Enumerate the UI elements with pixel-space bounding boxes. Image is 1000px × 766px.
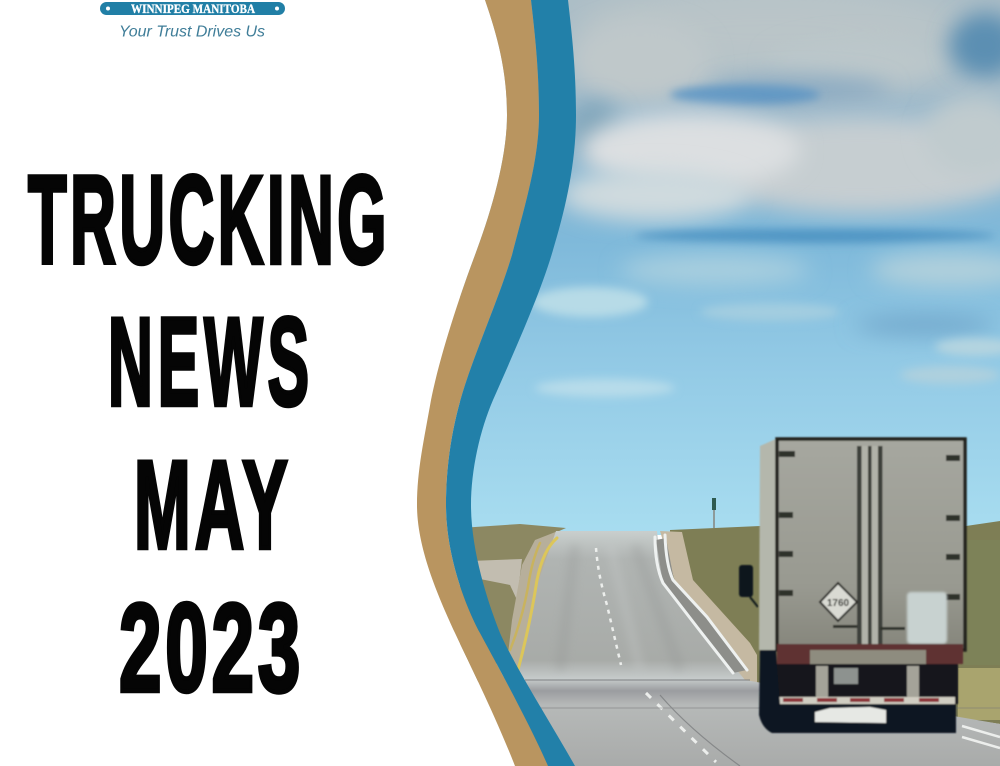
light gap under truck bbox=[815, 707, 886, 723]
left grass bbox=[460, 524, 566, 700]
right grass bbox=[670, 521, 1000, 724]
mirror bbox=[739, 565, 758, 607]
logo banner: WINNIPEG MANITOBA bbox=[131, 2, 255, 16]
road lane dashes bbox=[596, 548, 1000, 762]
underride frame bbox=[772, 664, 958, 704]
sky with clouds bbox=[460, 0, 1000, 535]
title bbox=[28, 151, 390, 718]
road wear streaks bbox=[560, 545, 680, 670]
logo bbox=[100, 2, 285, 40]
hazmat placard bbox=[820, 583, 857, 621]
truck bbox=[739, 438, 965, 733]
roadside sign bbox=[712, 498, 716, 528]
logo tagline: Your Trust Drives Us bbox=[119, 24, 265, 40]
door handles bbox=[833, 625, 905, 630]
background photo: truck on highway bbox=[460, 0, 1000, 766]
title: NEWS bbox=[108, 293, 314, 432]
road surface bbox=[495, 531, 1000, 766]
left gravel patch bbox=[470, 559, 522, 600]
white left panel bbox=[0, 0, 515, 766]
door bars bbox=[857, 446, 882, 651]
dark asphalt between white lines bbox=[656, 538, 747, 673]
tan wave band bbox=[417, 0, 549, 766]
white edge lines bbox=[655, 535, 747, 673]
white patch bbox=[907, 592, 947, 644]
title line: may: MAY bbox=[134, 436, 292, 575]
left road shoulder bbox=[505, 531, 560, 680]
right road shoulder bbox=[660, 531, 757, 690]
bumper band bbox=[777, 644, 963, 664]
wheels and lower frame bbox=[759, 650, 956, 733]
title line: 2023: 2023 bbox=[119, 579, 304, 718]
yellow edge line bbox=[510, 538, 557, 670]
blue wave band bbox=[446, 0, 576, 766]
hinges bbox=[779, 451, 960, 600]
trailer side bbox=[759, 438, 778, 652]
title line: trucking: TRUCKING bbox=[28, 151, 390, 290]
trailer rear doors bbox=[777, 439, 965, 650]
hazmat placard: 1760 bbox=[827, 598, 850, 609]
road cracks and seams bbox=[525, 680, 1000, 766]
reflector strip bbox=[779, 697, 955, 704]
